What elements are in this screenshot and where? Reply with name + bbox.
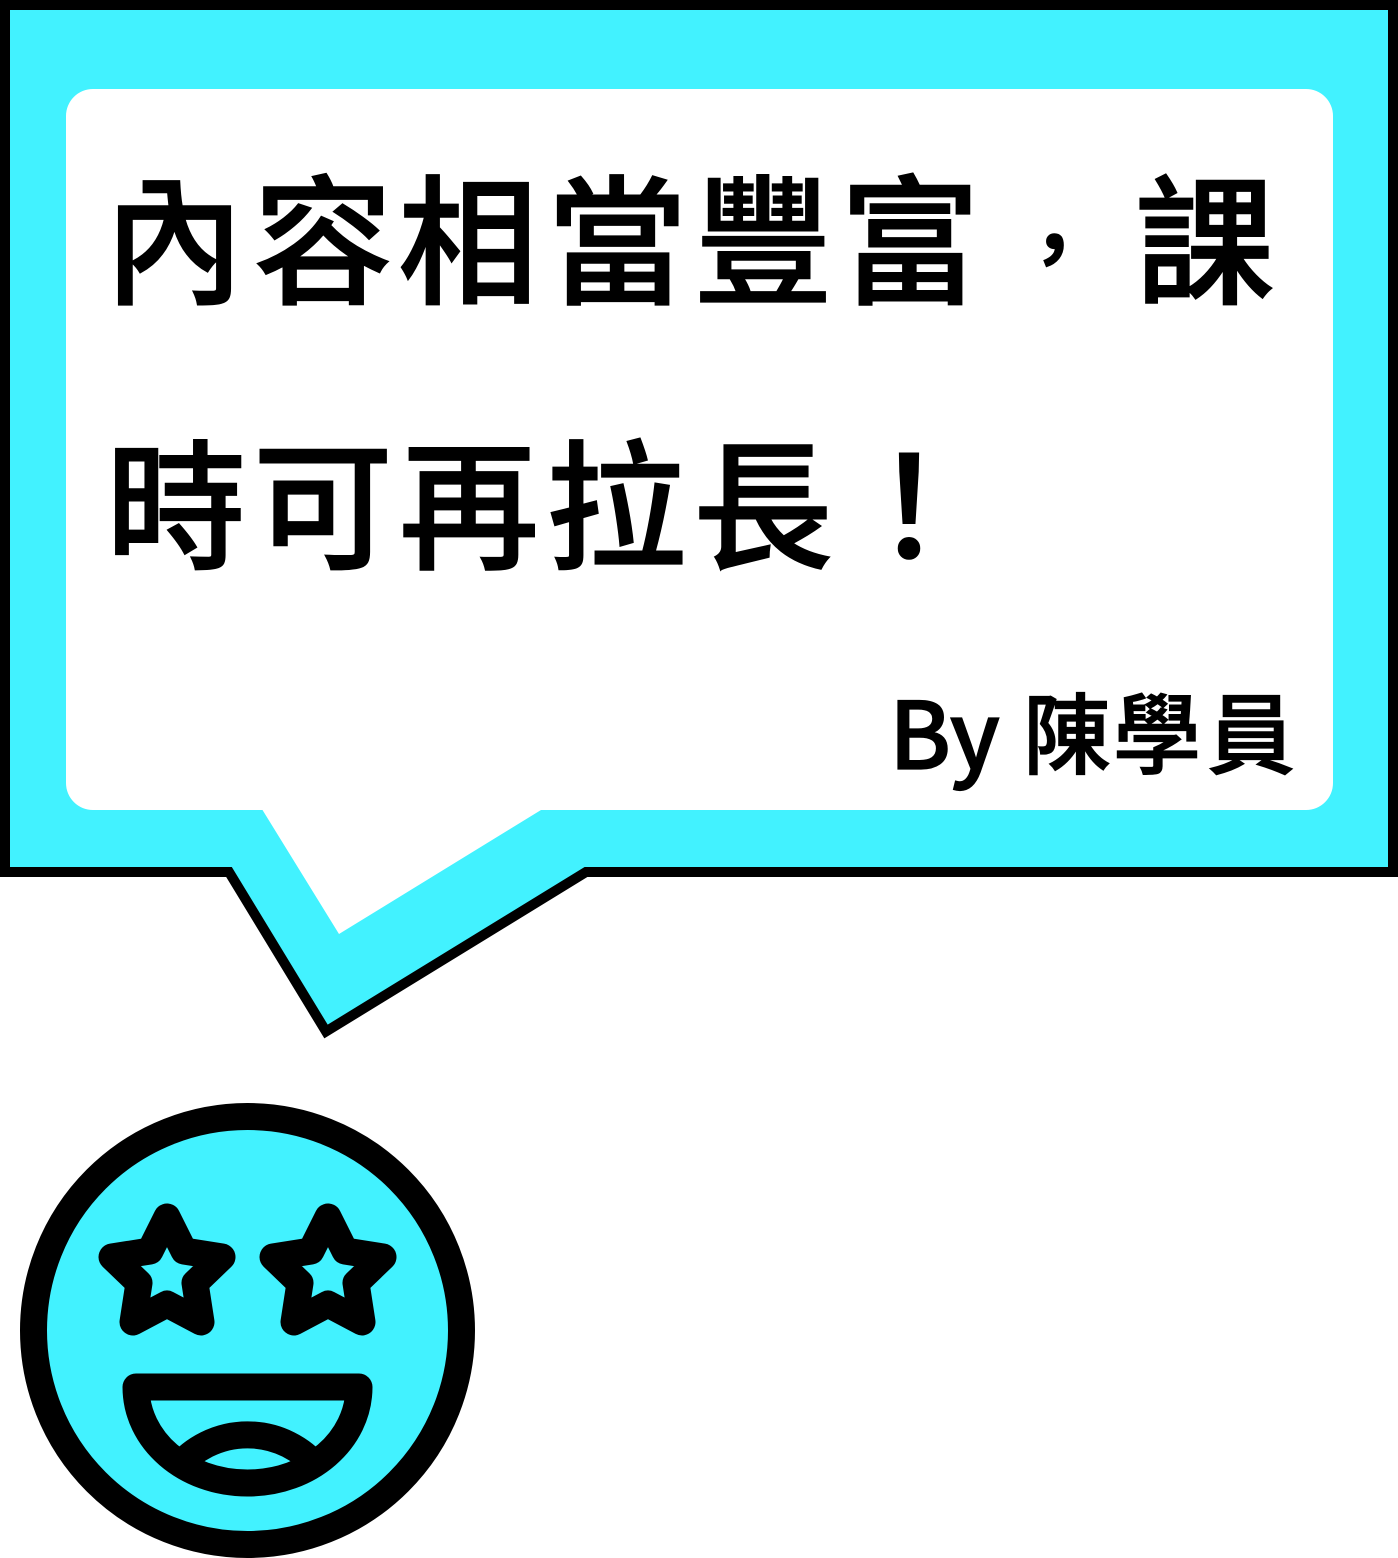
attribution xyxy=(889,661,1295,796)
right star eye xyxy=(273,1217,383,1322)
attribution: 陳學員 xyxy=(1023,666,1295,793)
quote text line 2: 時可再拉長！ xyxy=(106,397,979,599)
face circle xyxy=(34,1116,462,1544)
icon: star-eyed smiling face xyxy=(34,1116,462,1544)
open mouth xyxy=(136,1387,359,1483)
attribution: By xyxy=(889,661,1000,796)
quote text line 1: 內容相當豐富 xyxy=(104,132,980,334)
tongue line xyxy=(177,1435,318,1468)
quote text line 1: 課 xyxy=(1135,132,1275,334)
left star eye xyxy=(112,1217,222,1322)
quote text line 1: ， xyxy=(1009,178,1099,308)
speech bubble xyxy=(5,5,1393,1032)
bubble outer frame xyxy=(5,5,1393,1032)
bubble inner panel xyxy=(66,89,1333,934)
